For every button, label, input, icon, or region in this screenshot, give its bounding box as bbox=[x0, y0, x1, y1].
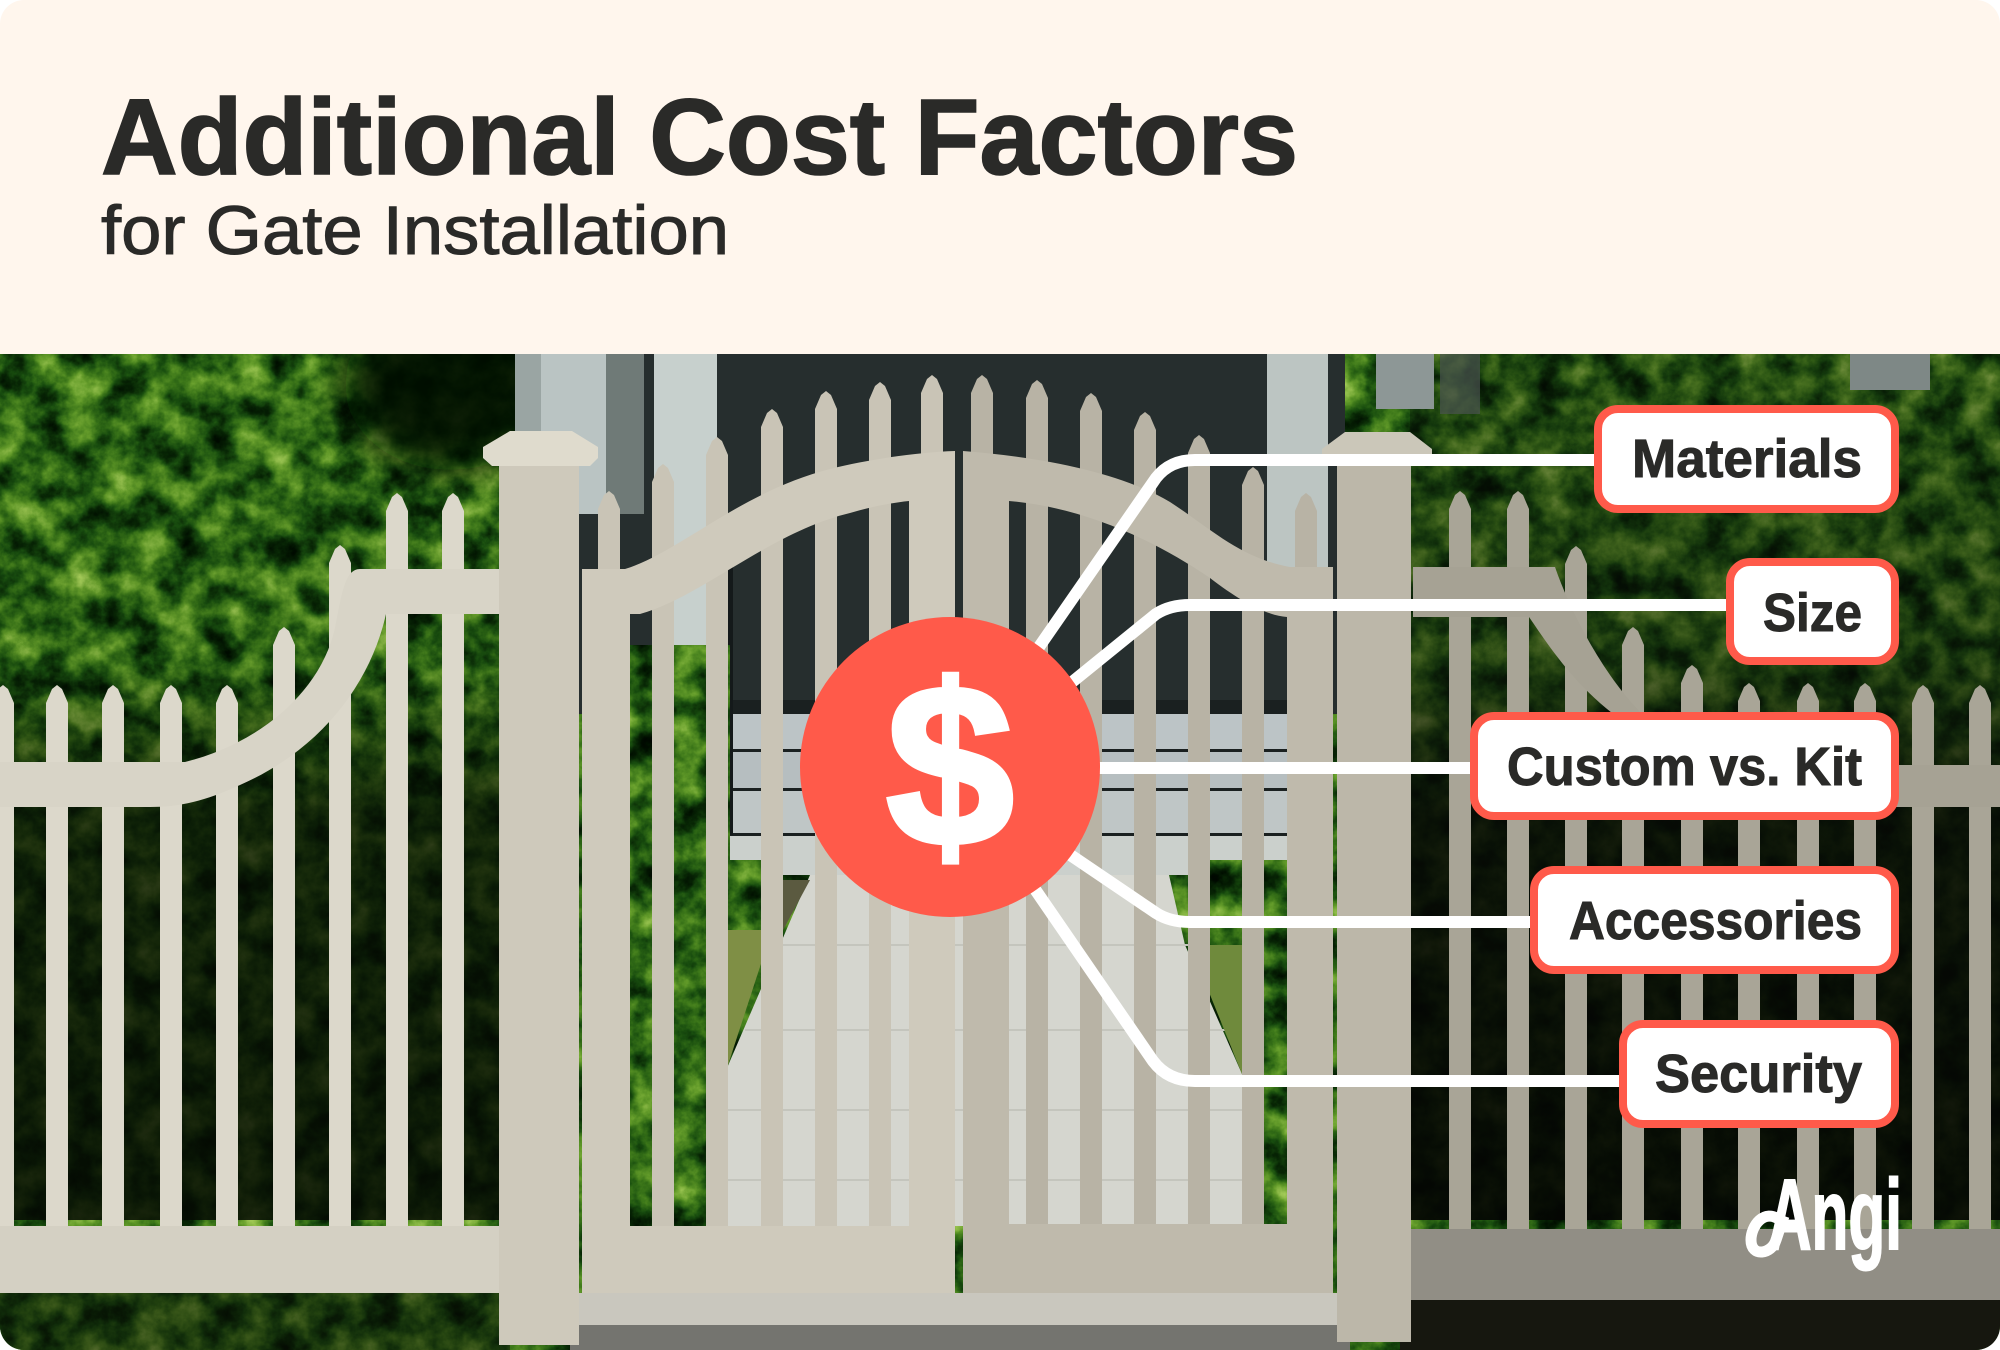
label: Security: Security bbox=[1655, 1044, 1862, 1104]
soil and grass strips bbox=[722, 880, 1242, 1074]
label: Size bbox=[1730, 562, 1895, 661]
right gate pickets bbox=[971, 375, 1317, 1230]
dollar circle bbox=[800, 617, 1100, 917]
connector lines bbox=[1030, 460, 1730, 1081]
right post bbox=[1322, 432, 1432, 1342]
left post bbox=[483, 431, 598, 1345]
header panel bbox=[0, 0, 2000, 354]
label: Materials: Materials bbox=[1632, 429, 1862, 489]
photo: gate and picket fence bbox=[0, 300, 2000, 1350]
walkway paving joints bbox=[727, 945, 1242, 1180]
right gate leaf bbox=[963, 451, 1333, 1293]
logo: Angi bbox=[1746, 1176, 1898, 1272]
left fence bottom rail bbox=[0, 1226, 500, 1293]
house behind the gate bbox=[515, 354, 1930, 875]
label: Materials bbox=[1598, 409, 1895, 509]
label: Accessories bbox=[1534, 870, 1895, 970]
title: Additional Cost Factors bbox=[101, 76, 1298, 197]
logo: Angi: Angi bbox=[1768, 1159, 1902, 1271]
dollar circle: $ bbox=[886, 637, 1014, 894]
subtitle: for Gate Installation bbox=[101, 192, 729, 269]
label: Custom vs. Kit bbox=[1474, 716, 1895, 816]
bushes beside the walkway bbox=[630, 645, 1290, 1226]
right fence pickets bbox=[1449, 491, 1991, 1232]
foliage backdrop bbox=[0, 300, 2000, 1350]
left gate pickets bbox=[598, 375, 943, 1230]
left fence pickets bbox=[0, 493, 464, 1230]
label: Size: Size bbox=[1763, 583, 1862, 643]
right fence top rail bbox=[1413, 567, 2000, 807]
left gate leaf bbox=[582, 451, 955, 1293]
label: Accessories: Accessories bbox=[1569, 891, 1862, 951]
ground bbox=[0, 1293, 2000, 1350]
label: Custom vs. Kit: Custom vs. Kit bbox=[1507, 737, 1862, 797]
walkway bbox=[727, 875, 1242, 1226]
right fence bottom rail bbox=[1411, 1229, 2000, 1300]
label: Security bbox=[1623, 1024, 1895, 1124]
left fence top rail bbox=[0, 569, 500, 807]
